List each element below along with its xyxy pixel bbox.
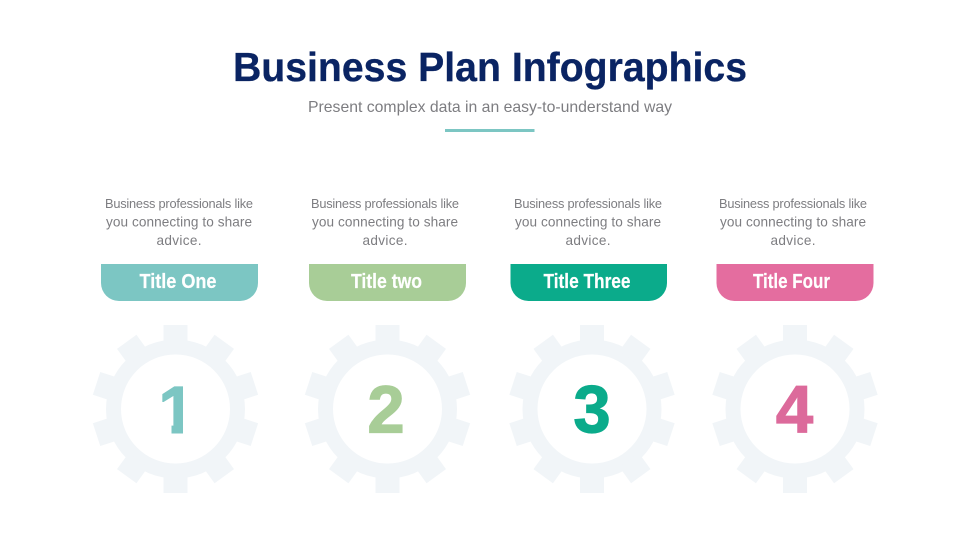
icon: gear with number 1	[93, 325, 258, 493]
text block: step 1 description	[105, 196, 253, 248]
text block: step 4 description: Business professionals like	[719, 196, 867, 211]
text block: step 4 description: you connecting to share	[720, 214, 866, 230]
title: Business Plan Infographics	[233, 44, 747, 90]
text block: step 3 description: you connecting to share	[515, 214, 661, 230]
panel: step 1	[93, 196, 258, 493]
icon: gear with number 2: 2	[367, 372, 405, 448]
panel: step 2	[305, 196, 470, 493]
icon: gear with number 1: 1	[158, 373, 196, 448]
text block: step 3 description	[514, 196, 662, 248]
heading: Title Three: Title Three	[544, 271, 630, 293]
icon: gear with number 2	[305, 325, 470, 493]
panel: step 3	[509, 196, 675, 493]
text block: step 2 description: you connecting to share	[312, 214, 458, 230]
subtitle: Present complex data in an easy-to-understand way	[308, 99, 672, 116]
icon: gear with number 3	[509, 325, 675, 493]
text block: step 2 description: Business professionals like	[311, 196, 459, 211]
text block: step 4 description: advice.	[770, 233, 816, 248]
text block: step 1 description: Business professionals like	[105, 196, 253, 211]
heading: Title Four	[716, 264, 874, 301]
text block: step 3 description: Business professionals like	[514, 196, 662, 211]
heading: Title Three	[510, 264, 667, 301]
icon: gear with number 4	[712, 325, 878, 493]
icon: gear with number 4: 4	[776, 372, 813, 448]
heading: Title two	[309, 264, 466, 301]
text block: step 2 description: advice.	[362, 233, 408, 248]
heading: Title two: Title two	[351, 271, 422, 293]
text block: step 1 description: you connecting to share	[106, 214, 252, 230]
text block: step 4 description	[719, 196, 867, 248]
text block: step 2 description	[311, 196, 459, 248]
heading: Title One	[101, 264, 258, 301]
text block: step 3 description: advice.	[566, 233, 610, 248]
heading: Title Four: Title Four	[753, 271, 830, 293]
text block: step 1 description: advice.	[156, 233, 202, 248]
title underline	[445, 129, 534, 132]
heading: Title One: Title One	[140, 271, 216, 293]
icon: gear with number 3: 3	[573, 372, 611, 448]
panel: step 4	[712, 196, 878, 493]
